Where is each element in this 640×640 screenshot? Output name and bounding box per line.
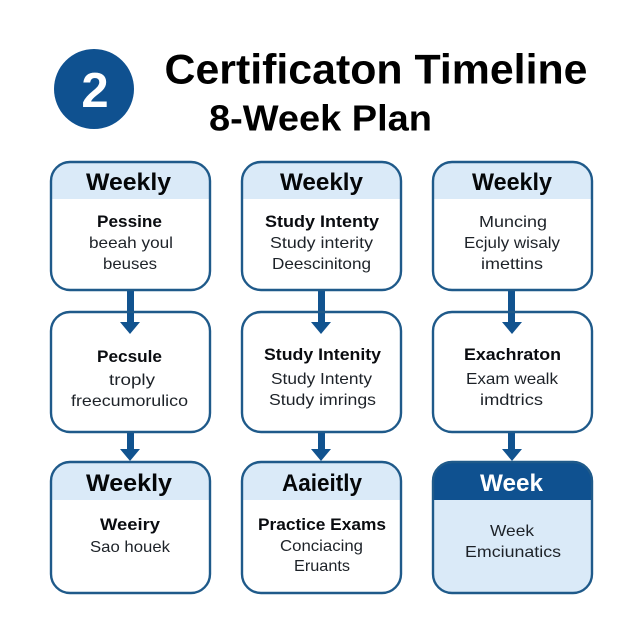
panel text: imettins xyxy=(481,256,543,273)
number badge: 2 xyxy=(81,64,109,118)
panel text xyxy=(465,523,561,561)
panel text: Exam wealk xyxy=(466,371,559,388)
arrow: column 1, row 1 to 2 xyxy=(120,290,140,334)
panel text: Sao houek xyxy=(90,539,171,556)
panel text: Study Intenty xyxy=(271,371,372,388)
heading: Weekly: Weekly xyxy=(280,169,364,196)
panel text xyxy=(258,516,386,575)
panel text: imdtrics xyxy=(480,392,543,409)
panel text: Deescinitong xyxy=(272,256,371,273)
arrow: column 3, row 2 to 3 xyxy=(502,432,522,461)
panel text: Pessine xyxy=(97,213,162,231)
panel text: Eruants xyxy=(294,558,350,575)
panel: row 2 column 3 xyxy=(433,312,592,432)
heading: Weekly: Weekly xyxy=(86,470,173,497)
panel text: troply xyxy=(109,372,155,389)
panel text: beuses xyxy=(103,256,157,273)
panel text xyxy=(264,346,382,409)
panel text xyxy=(265,213,380,273)
arrow: column 2, row 1 to 2 xyxy=(311,290,331,334)
panel: row 1 column 3 xyxy=(433,162,592,290)
panel text: Study Intenity xyxy=(264,346,382,364)
panel: final week highlighted xyxy=(432,461,593,593)
panel text: Study Intenty xyxy=(265,213,380,231)
panel text: Study interity xyxy=(270,235,373,252)
panel: row 2 column 2 xyxy=(242,312,401,432)
panel text: beeah youl xyxy=(89,235,173,252)
panel text xyxy=(71,348,188,410)
heading: Weekly: Weekly xyxy=(86,169,172,196)
heading: Aaieitly: Aaieitly xyxy=(282,470,363,497)
heading: Week: Week xyxy=(480,470,544,497)
panel text: Weeiry xyxy=(100,516,161,534)
panel text: Conciacing xyxy=(280,538,363,555)
panel: row 1 column 2 xyxy=(242,162,401,290)
subtitle: 8-Week Plan xyxy=(209,98,432,138)
panel text: Exachraton xyxy=(464,346,561,364)
arrow: column 1, row 2 to 3 xyxy=(120,432,140,461)
panel: row 2 column 1 xyxy=(51,312,210,432)
panel text xyxy=(89,213,173,273)
panel text: Muncing xyxy=(479,214,547,231)
title: Certificaton Timeline xyxy=(164,46,588,92)
arrow: column 2, row 2 to 3 xyxy=(311,432,331,461)
panel text xyxy=(90,516,171,556)
panel text: Ecjuly wisaly xyxy=(464,235,560,252)
panel: row 1 column 1 xyxy=(51,162,210,290)
panel text: Emciunatics xyxy=(465,544,561,561)
panel text xyxy=(464,214,560,273)
number badge xyxy=(54,49,134,129)
panel text: Practice Exams xyxy=(258,516,386,534)
heading: Weekly: Weekly xyxy=(472,169,553,196)
panel text: Week xyxy=(490,523,535,540)
panel text: Pecsule xyxy=(97,348,162,366)
panel text: freecumorulico xyxy=(71,393,188,410)
panel text: Study imrings xyxy=(269,392,376,409)
panel text xyxy=(464,346,561,409)
arrow: column 3, row 1 to 2 xyxy=(502,290,522,334)
panel: row 3 column 1 xyxy=(51,462,210,593)
panel: row 3 column 2 xyxy=(242,462,401,593)
